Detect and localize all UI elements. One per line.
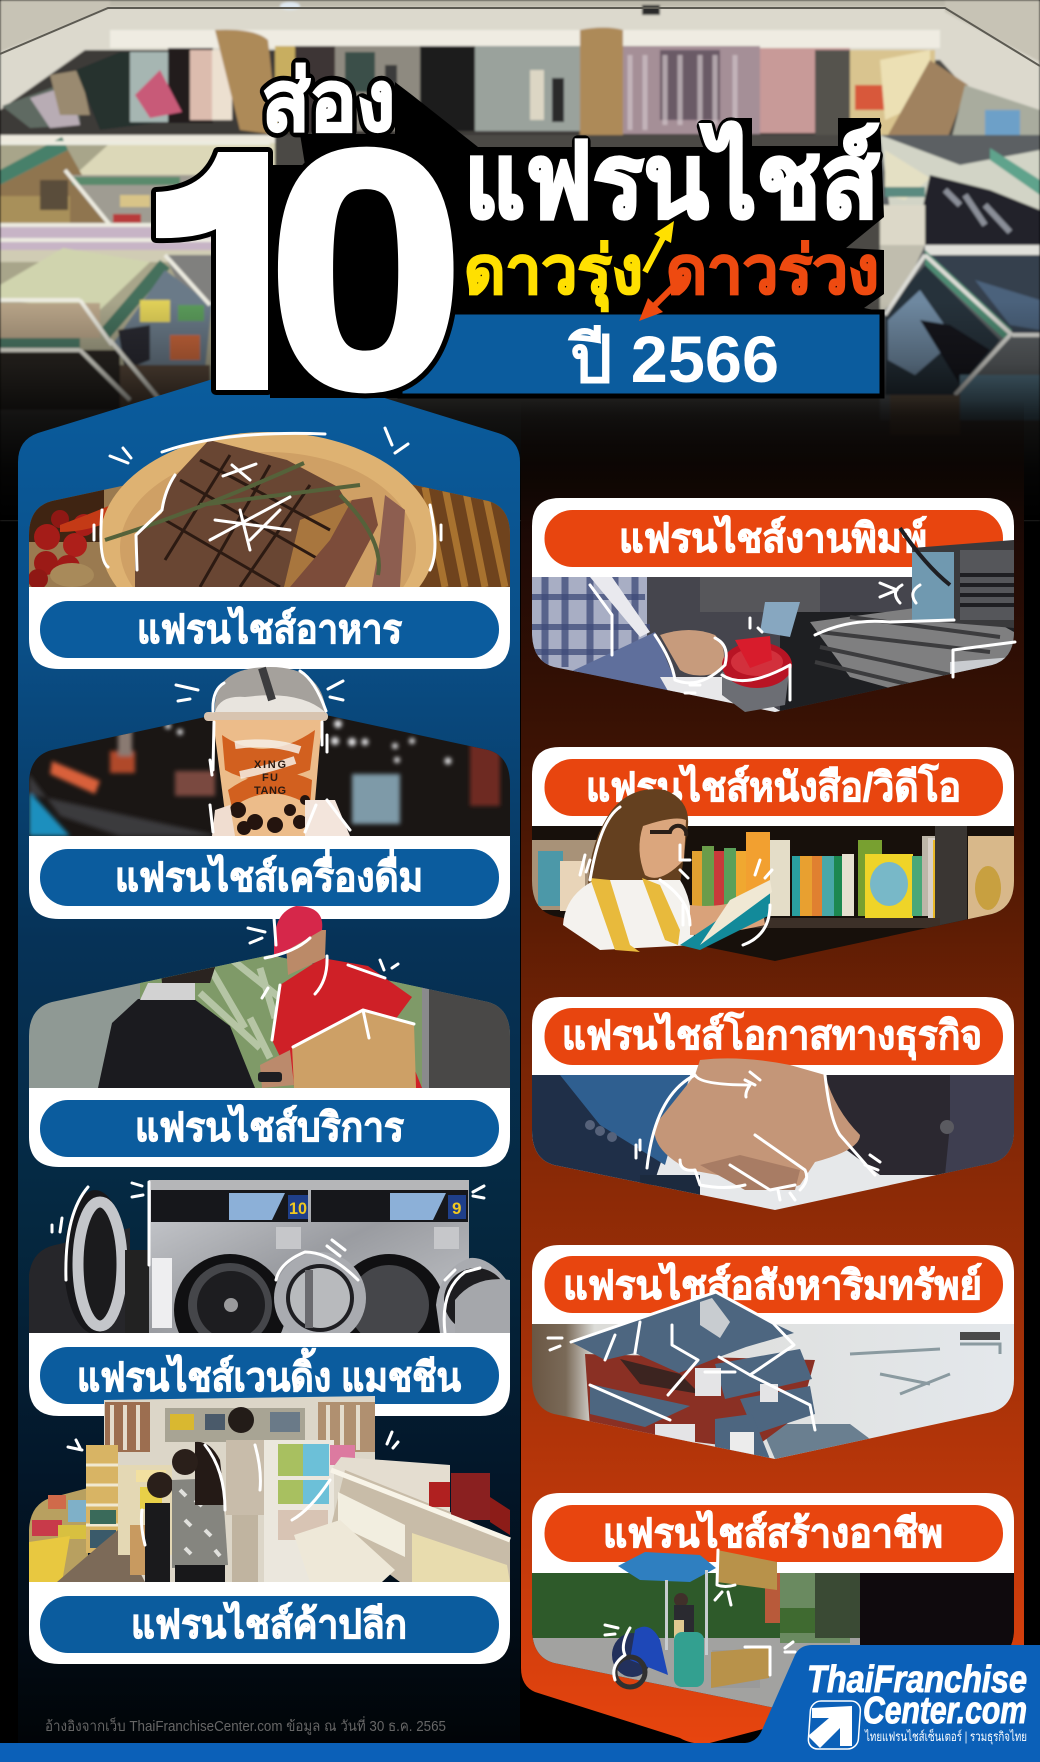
background photo: shopping mall interior — [0, 0, 1040, 520]
title word: แฟรนไชส์: แฟรนไชส์ — [464, 122, 879, 240]
title word: ส่อง: ส่อง — [262, 54, 395, 148]
panel: left blue column — [18, 362, 520, 1745]
label band white — [532, 997, 1014, 1075]
doodle lines on book photo — [580, 807, 772, 945]
photo: printing press and red paint — [532, 528, 1015, 717]
title number: 0: 0 — [267, 80, 465, 460]
arrow: up yellow — [645, 221, 674, 272]
photo: business handshake — [532, 1058, 1014, 1215]
doodle lines on drink photo — [176, 671, 350, 832]
label text: แฟรนไชส์ค้าปลีก — [131, 1601, 407, 1647]
card: printing franchise — [532, 498, 1015, 717]
label band white — [532, 498, 1014, 577]
label pill — [40, 1100, 499, 1157]
label text: แฟรนไชส์บริการ — [135, 1104, 404, 1150]
footnote source: อ้างอิงจากเว็บ ThaiFranchiseCenter.com ข้อมูล ณ วันที่ 30 ธ.ค. 2565 — [45, 1716, 446, 1735]
card: book and video franchise — [532, 747, 1014, 966]
card: vending machine franchise — [29, 1180, 510, 1416]
label band white — [29, 587, 510, 669]
arrow: down orange — [639, 278, 682, 321]
label band white — [29, 1333, 510, 1416]
title black backdrop — [270, 82, 884, 398]
title word: ดาวร่วง: ดาวร่วง — [666, 233, 879, 307]
card: retail franchise — [29, 1396, 510, 1664]
photo: street vendor motorbike cart — [532, 1550, 1014, 1713]
doodle lines on house photo — [548, 1292, 815, 1430]
icon: logo arrow — [808, 1701, 861, 1749]
photo: laundry vending machines — [29, 1180, 510, 1366]
photo: bubble milk tea over night street — [29, 667, 510, 836]
title word: แฟรนไชส์: แฟรนไชส์ — [464, 122, 879, 240]
panel: right orange column — [521, 400, 1024, 1744]
doodle lines on steak photo — [94, 428, 441, 570]
logo text — [807, 1659, 1027, 1745]
doodle lines on handshake photo — [636, 1072, 880, 1200]
label text: แฟรนไชส์หนังสือ/วิดีโอ — [586, 764, 961, 810]
label band white — [532, 747, 1014, 826]
doodle lines on service photo — [248, 918, 414, 1047]
doodle lines on retail photo — [68, 1432, 398, 1545]
title year bar — [400, 312, 882, 396]
label pill — [544, 1008, 1003, 1065]
card: career building franchise — [532, 1493, 1014, 1713]
card: food franchise — [28, 428, 510, 669]
photo: bubble milk tea over night street: FU — [262, 772, 278, 784]
label band white — [29, 836, 510, 919]
label text: แฟรนไชส์งานพิมพ์ — [619, 515, 927, 561]
label pill — [544, 510, 1003, 567]
card: business opportunity franchise — [532, 997, 1014, 1215]
label band white — [532, 1493, 1014, 1573]
photo: delivery man handing a parcel — [29, 906, 510, 1088]
card: real estate franchise — [532, 1245, 1014, 1464]
label text: แฟรนไชส์โอกาสทางธุรกิจ — [562, 1012, 982, 1061]
label text: แฟรนไชส์เครื่องดื่ม — [115, 849, 423, 900]
label band white — [29, 1088, 510, 1167]
logo background shape and footer bar — [0, 1645, 1040, 1762]
doodle lines on printing photo — [590, 583, 1015, 700]
label pill — [544, 1256, 1003, 1313]
photo: laundry vending machines: 10 — [289, 1199, 307, 1218]
card: beverage franchise — [29, 667, 510, 919]
label text: แฟรนไชส์เวนดิ้ง แมชชีน — [77, 1348, 461, 1400]
title number: 1 — [151, 147, 273, 395]
label pill — [544, 759, 1003, 816]
title number: 0: 0 — [267, 80, 465, 460]
photo: model house on blueprint — [532, 1292, 1014, 1464]
photo: bubble milk tea over night street: TANG — [254, 785, 286, 797]
card: service franchise — [29, 906, 510, 1167]
photo: grilled steak on wooden plate — [29, 426, 510, 587]
label pill — [40, 849, 499, 906]
label text: แฟรนไชส์อาหาร — [137, 606, 402, 652]
doodle lines on vendor photo — [605, 1550, 795, 1680]
label text: แฟรนไชส์อสังหาริมทรัพย์ — [563, 1262, 982, 1308]
label pill — [544, 1505, 1003, 1562]
title word: ส่อง: ส่อง — [262, 54, 395, 148]
label pill — [40, 1596, 499, 1653]
title block — [151, 58, 884, 398]
doodle lines on laundry photo — [52, 1182, 484, 1333]
logo: Thai Franchise Center with bottom bar — [0, 1645, 1040, 1762]
photo: retail store with shoppers — [29, 1396, 510, 1582]
label band white — [29, 1582, 510, 1664]
photo: woman reading among bookshelves — [532, 789, 1014, 966]
title number: 1: 1 — [143, 83, 332, 463]
photo: laundry vending machines: 9 — [452, 1199, 461, 1218]
label text: แฟรนไชส์สร้างอาชีพ — [603, 1510, 943, 1556]
label pill — [40, 1347, 499, 1404]
label band white — [532, 1245, 1014, 1324]
photo: bubble milk tea over night street: XING — [254, 759, 286, 771]
title year bar: ปี 2566 — [567, 322, 779, 396]
title word: ดาวรุ่ง: ดาวรุ่ง — [464, 233, 643, 312]
label pill — [40, 601, 499, 658]
